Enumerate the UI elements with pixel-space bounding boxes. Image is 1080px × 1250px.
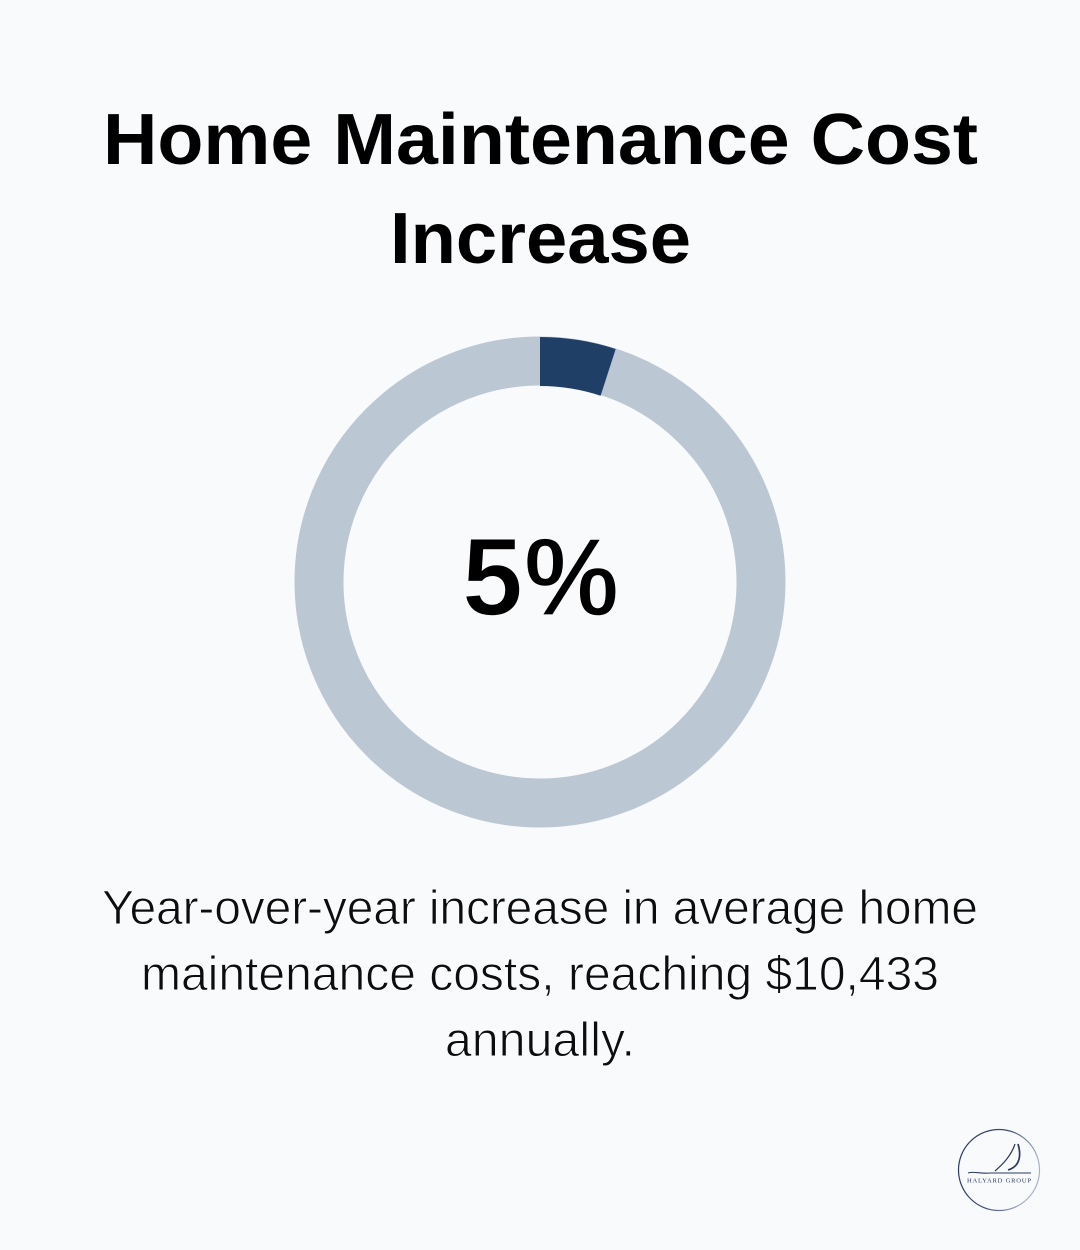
donut track bbox=[319, 361, 761, 803]
donut value bbox=[462, 516, 619, 639]
title: Increase bbox=[390, 199, 691, 279]
donut chart: 5 percent bbox=[319, 337, 761, 803]
icon: sailboat bbox=[968, 1144, 1031, 1173]
description text: maintenance costs, reaching $10,433 bbox=[141, 948, 939, 1001]
title: Home Maintenance Cost bbox=[103, 100, 978, 180]
description text: Year-over-year increase in average home bbox=[102, 882, 978, 935]
donut value: 5 bbox=[462, 516, 523, 639]
logo: Halyard Group bbox=[958, 1130, 1040, 1210]
description text: annually. bbox=[445, 1014, 635, 1067]
donut highlighted segment bbox=[540, 337, 616, 396]
logo wordmark: HALYARD GROUP bbox=[967, 1178, 1031, 1184]
description text bbox=[102, 882, 978, 1067]
logo ring bbox=[958, 1130, 1040, 1210]
donut value: % bbox=[524, 516, 619, 639]
title bbox=[103, 100, 978, 279]
